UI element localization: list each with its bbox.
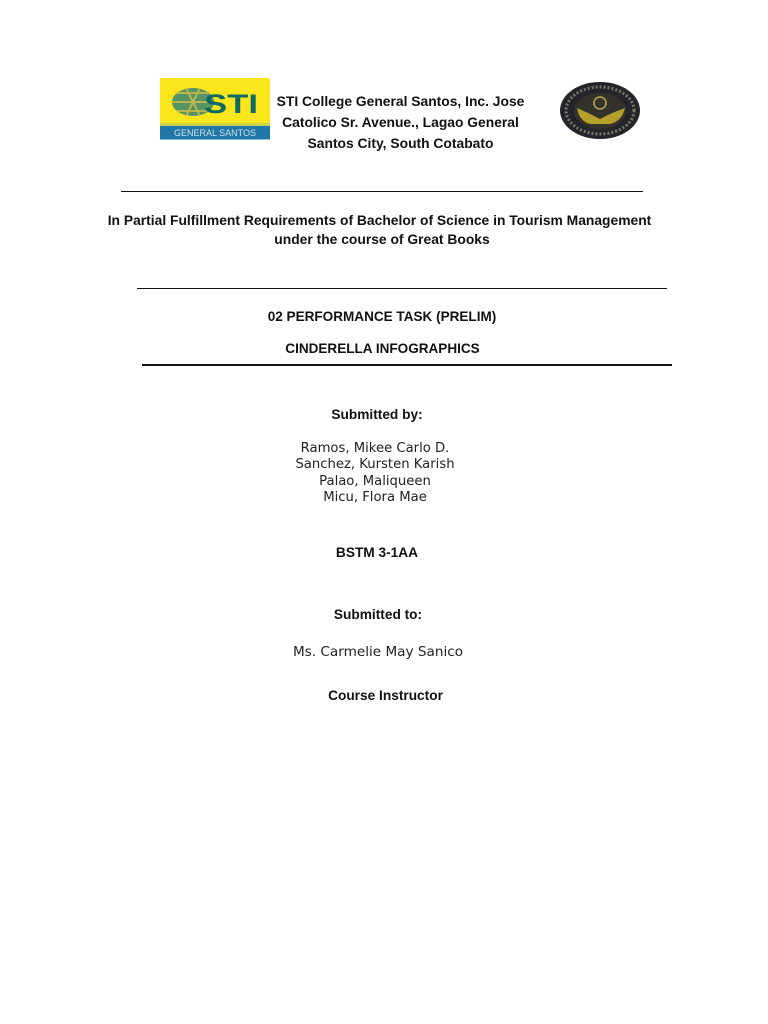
fulfillment statement: under the course of Great Books (274, 231, 490, 247)
school address heading: STI College General Santos, Inc. Jose (277, 93, 524, 109)
submitted to label: Submitted to: (334, 607, 422, 622)
logo: circular guild seal (560, 82, 640, 139)
logo: STI General Santos: GENERAL SANTOS (174, 128, 256, 138)
student names: Micu, Flora Mae (323, 490, 427, 505)
school address heading: Santos City, South Cotabato (308, 135, 493, 151)
divider rule 1 (121, 191, 643, 192)
student names: Sanchez, Kursten Karish (295, 457, 455, 472)
student names: Palao, Maliqueen (319, 474, 431, 488)
divider rule 2 (137, 288, 667, 289)
student names: Ramos, Mikee Carlo D. (301, 440, 449, 456)
divider rule 3 (142, 364, 672, 366)
fulfillment statement (108, 212, 652, 247)
submitted by label: Submitted by: (331, 407, 423, 422)
school address heading (277, 93, 524, 151)
course instructor label: Course Instructor (328, 688, 443, 703)
logo: STI General Santos: STI (204, 89, 258, 119)
logo: STI General Santos (160, 78, 270, 140)
infographics heading: CINDERELLA INFOGRAPHICS (285, 341, 480, 356)
instructor name: Ms. Carmelie May Sanico (293, 644, 463, 660)
section label: BSTM 3-1AA (336, 545, 418, 560)
school address heading: Catolico Sr. Avenue., Lagao General (282, 114, 519, 130)
student names (295, 440, 455, 505)
performance task heading: 02 PERFORMANCE TASK (PRELIM) (268, 309, 496, 324)
fulfillment statement: In Partial Fulfillment Requirements of Bachelor of Science in Tourism Management (108, 212, 651, 228)
